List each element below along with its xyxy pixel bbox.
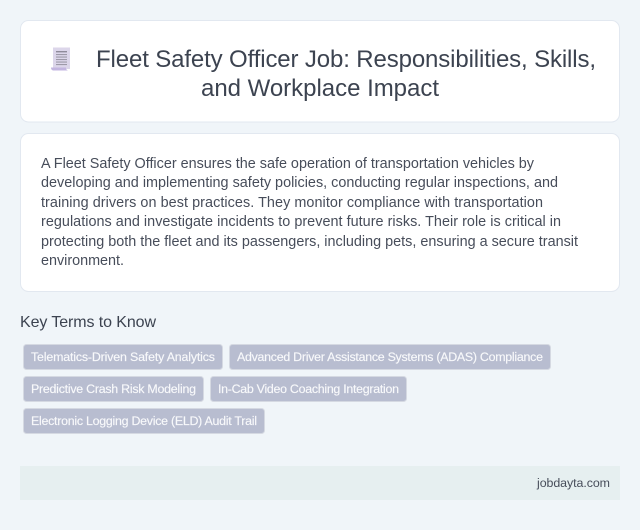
text block: description paragraph: developing and implementing safety policies, conducting regular inspections, and [41, 175, 558, 191]
chip: ELD [24, 408, 264, 434]
chip: telematics: Telematics-Driven Safety Analytics [31, 350, 215, 364]
icon: document scroll [51, 48, 70, 70]
text block: description paragraph: training drivers on best practices. They monitor compliance with transportation [41, 195, 543, 211]
text block: description paragraph: A Fleet Safety Officer ensures the safe operation of transportation vehicles by [41, 156, 535, 172]
panel: title card [20, 20, 620, 122]
chip: telematics [24, 344, 222, 370]
text block: description paragraph: protecting both the fleet and its passengers, including pets, ensuring a secure transit [41, 234, 578, 250]
chip: predictive: Predictive Crash Risk Modeling [31, 382, 196, 396]
chip: in-cab video: In-Cab Video Coaching Integration [218, 382, 399, 396]
text block: description paragraph: regulations and investigate incidents to prevent future risks. Their role is critical in [41, 214, 561, 230]
footer: jobdayta.com [536, 476, 610, 490]
heading: key terms: Key Terms to Know [20, 314, 156, 331]
heading: title: and Workplace Impact [201, 75, 439, 102]
footer [20, 466, 620, 500]
chip: predictive [24, 376, 204, 402]
text block: description paragraph: environment. [41, 253, 124, 269]
heading: title: Fleet Safety Officer Job: Responsibilities, Skills, [96, 46, 596, 73]
chip: in-cab video [210, 376, 406, 402]
panel: description [20, 134, 620, 292]
chip: ADAS: Advanced Driver Assistance Systems (ADAS) Compliance [237, 350, 543, 364]
text block: description paragraph [41, 156, 578, 269]
heading: title [96, 46, 596, 102]
chip: ELD: Electronic Logging Device (ELD) Audit Trail [31, 414, 257, 428]
chip: ADAS [230, 344, 550, 370]
